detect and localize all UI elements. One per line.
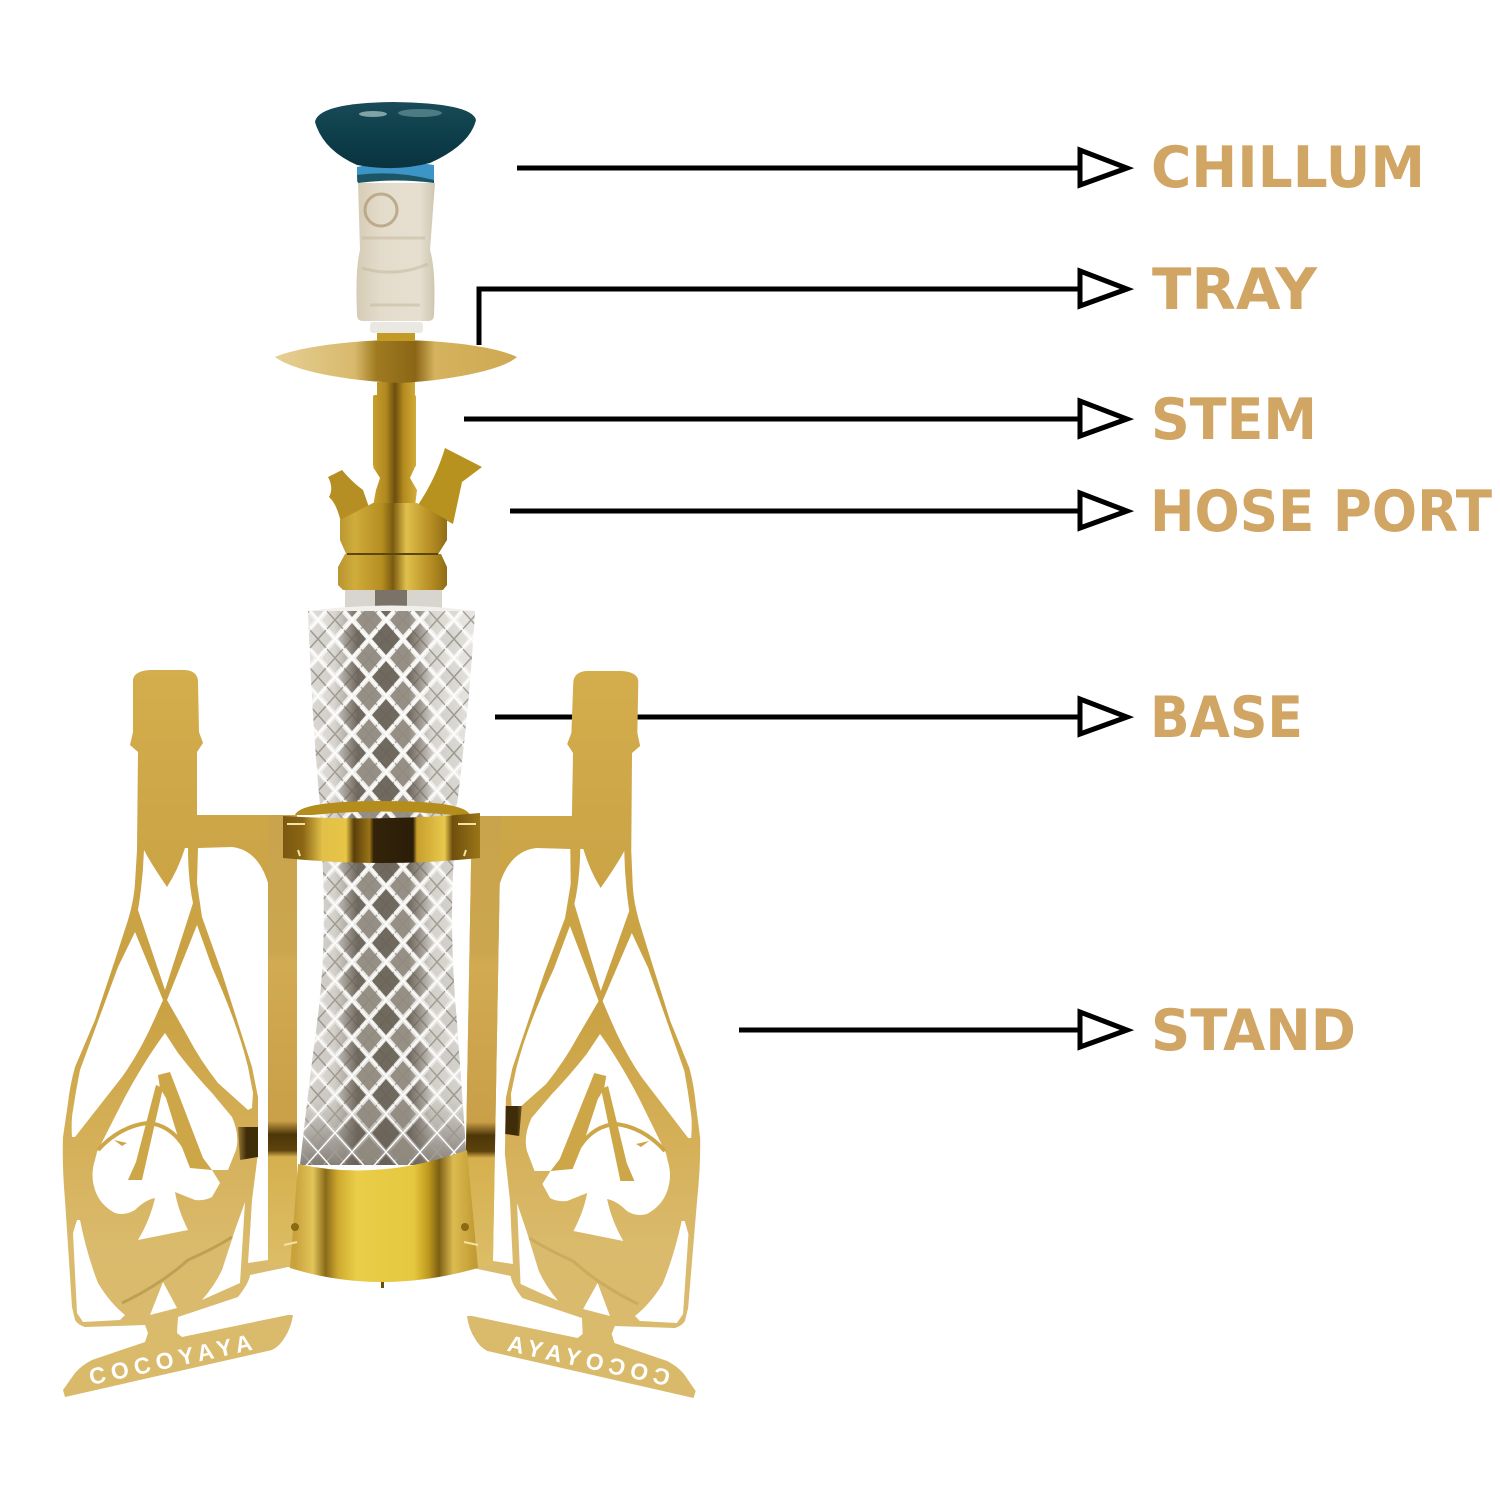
arrow: tray [479,271,1127,345]
arrow: stand [739,1012,1127,1047]
right stand: bottle with mirrored foot [454,671,709,1398]
glass base vase [300,590,475,1165]
arrow: chillum [517,150,1127,185]
brand cut-out text: COCOYAYA [87,1329,254,1390]
label: stem: STEM [1151,387,1317,453]
label: stand: STAND [1151,998,1356,1064]
head: stem with hose ports [328,382,482,590]
tray [275,332,517,383]
blue wrap [357,162,434,182]
callout arrows [464,150,1127,1047]
connector body [340,503,447,556]
ace letter mirrored [550,1073,666,1181]
body shading mirrored [505,1106,522,1136]
arrow: hose port [510,493,1127,528]
label: chillum: CHILLUM [1151,135,1425,201]
knurled stem [373,382,417,506]
arrow: stem [464,401,1127,436]
mirrored brand cut-out text: COCOYAYA [505,1330,673,1391]
chillum bowl [315,102,476,333]
label: base: BASE [1150,685,1303,751]
label: tray: TRAY [1152,257,1318,323]
ace letter [98,1072,212,1180]
collar [338,554,447,590]
teal bowl [315,102,476,168]
body shading [238,1127,258,1160]
clay body [356,183,435,321]
part labels [1150,135,1492,1064]
lower gold cup [284,1150,478,1288]
upper gold ring [283,801,480,863]
left hose port [328,470,370,528]
right hose port [418,448,482,524]
left stand: bottle with foot [63,670,305,1397]
arrow: base [495,699,1127,734]
